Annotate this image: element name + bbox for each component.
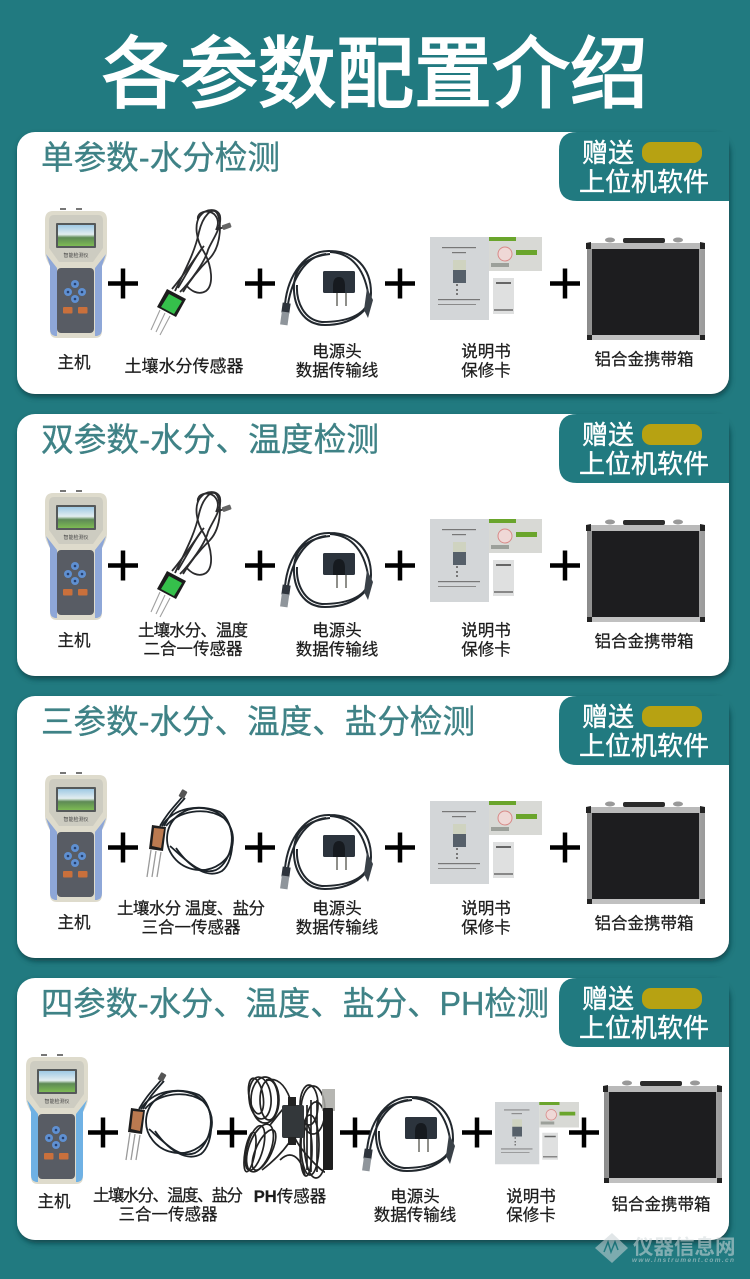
plus xyxy=(245,268,275,298)
plus xyxy=(340,1118,370,1148)
badge: free software: 上位机软件 xyxy=(579,1013,709,1043)
label: adapter and cable: 数据传输线 xyxy=(296,918,378,937)
plus xyxy=(217,1118,247,1148)
badge: free software: 赠送 xyxy=(582,984,634,1014)
panel: dual parameter xyxy=(17,414,729,676)
label: sensor: 土壤水分传感器 xyxy=(124,356,244,376)
heading: single parameter: 单参数-水分检测 xyxy=(41,139,280,176)
icon: aluminium case xyxy=(586,802,705,904)
label: case: 铝合金携带箱 xyxy=(612,1195,710,1214)
label: manual: 保修卡 xyxy=(461,640,511,659)
label: host: 主机 xyxy=(58,631,91,650)
icon: manual and warranty card xyxy=(430,519,542,602)
label: host: 主机 xyxy=(38,1192,71,1211)
label: manual: 说明书 xyxy=(461,342,511,361)
panel: three parameter xyxy=(17,696,729,958)
plus xyxy=(108,832,138,862)
badge: free software: 赠送 xyxy=(582,702,634,732)
icon: three-in-one sensor xyxy=(147,789,237,877)
watermark: www.instrument.com.cn xyxy=(632,1257,734,1264)
heading: dual parameter: 双参数-水分、温度检测 xyxy=(41,421,379,458)
label: adapter and cable: 数据传输线 xyxy=(296,361,378,380)
badge: free software: 上位机软件 xyxy=(579,731,709,761)
label: PH sensor: PH传感器 xyxy=(254,1187,327,1206)
plus xyxy=(245,832,275,862)
label: adapter and cable: 电源头 xyxy=(312,899,362,918)
plus xyxy=(462,1118,492,1148)
plus xyxy=(108,550,138,580)
badge: free software xyxy=(559,414,729,483)
icon: power adapter and cable xyxy=(280,533,373,607)
icon: manual and warranty card xyxy=(495,1102,579,1164)
label: sensor: 土壤水分 温度、盐分 xyxy=(117,898,265,918)
icon: soil moisture sensor xyxy=(151,210,232,335)
label: adapter and cable: 数据传输线 xyxy=(296,640,378,659)
label: case: 铝合金携带箱 xyxy=(594,914,694,933)
title: 各参数配置介绍 xyxy=(102,30,648,118)
label: manual: 保修卡 xyxy=(461,918,511,937)
icon: host device xyxy=(45,490,107,620)
icon: two-in-one sensor xyxy=(151,492,232,617)
label: host: 主机 xyxy=(58,353,91,372)
plus xyxy=(385,268,415,298)
label: adapter and cable: 电源头 xyxy=(312,342,362,361)
label: sensor: 三合一传感器 xyxy=(118,1205,218,1224)
watermark xyxy=(595,1233,736,1264)
badge: free software xyxy=(559,978,729,1047)
label: case: 铝合金携带箱 xyxy=(594,632,694,651)
icon: manual and warranty card xyxy=(430,237,542,320)
label: sensor: 土壤水分、温度 xyxy=(138,620,248,640)
label: sensor: 三合一传感器 xyxy=(142,918,241,937)
icon: aluminium case xyxy=(603,1080,722,1183)
plus xyxy=(88,1118,118,1148)
badge: free software: 上位机软件 xyxy=(579,449,709,479)
label: sensor: 二合一传感器 xyxy=(144,640,243,658)
plus xyxy=(108,268,138,298)
badge: free software: 赠送 xyxy=(582,138,634,168)
label: adapter and cable: 电源头 xyxy=(312,621,362,640)
icon: host device xyxy=(26,1054,88,1184)
label: case: 铝合金携带箱 xyxy=(594,350,694,369)
label: adapter and cable: 电源头 xyxy=(390,1187,440,1206)
icon: aluminium case xyxy=(586,520,705,622)
icon: three-in-one sensor xyxy=(126,1072,216,1160)
heading: four parameter: 四参数-水分、温度、盐分、PH检测 xyxy=(41,985,549,1022)
icon: host device xyxy=(45,772,107,902)
label: manual: 保修卡 xyxy=(506,1206,556,1224)
plus xyxy=(569,1118,599,1148)
badge: free software: 上位机软件 xyxy=(579,167,709,197)
label: host: 主机 xyxy=(58,913,91,932)
label: manual: 保修卡 xyxy=(461,361,511,380)
label: manual: 说明书 xyxy=(506,1187,556,1206)
badge: free software xyxy=(559,696,729,765)
panel: four parameter xyxy=(17,978,729,1240)
icon: aluminium case xyxy=(586,238,705,340)
icon: PH sensor xyxy=(241,1076,335,1178)
plus xyxy=(245,550,275,580)
label: adapter and cable: 数据传输线 xyxy=(374,1206,456,1224)
panel: single parameter xyxy=(17,132,729,394)
icon: power adapter and cable xyxy=(362,1097,455,1171)
plus xyxy=(550,550,580,580)
icon: power adapter and cable xyxy=(280,815,373,889)
badge: free software xyxy=(559,132,729,201)
icon: power adapter and cable xyxy=(280,251,373,325)
heading: three parameter: 三参数-水分、温度、盐分检测 xyxy=(41,703,475,740)
label: manual: 说明书 xyxy=(461,621,511,640)
badge: free software: 赠送 xyxy=(582,420,634,450)
plus xyxy=(385,832,415,862)
icon: host device xyxy=(45,208,107,338)
plus xyxy=(385,550,415,580)
label: sensor: 土壤水分、温度、盐分 xyxy=(93,1185,243,1205)
label: manual: 说明书 xyxy=(461,899,511,918)
plus xyxy=(550,268,580,298)
plus xyxy=(550,832,580,862)
icon: manual and warranty card xyxy=(430,801,542,884)
watermark: 仪器信息网 xyxy=(633,1235,736,1259)
